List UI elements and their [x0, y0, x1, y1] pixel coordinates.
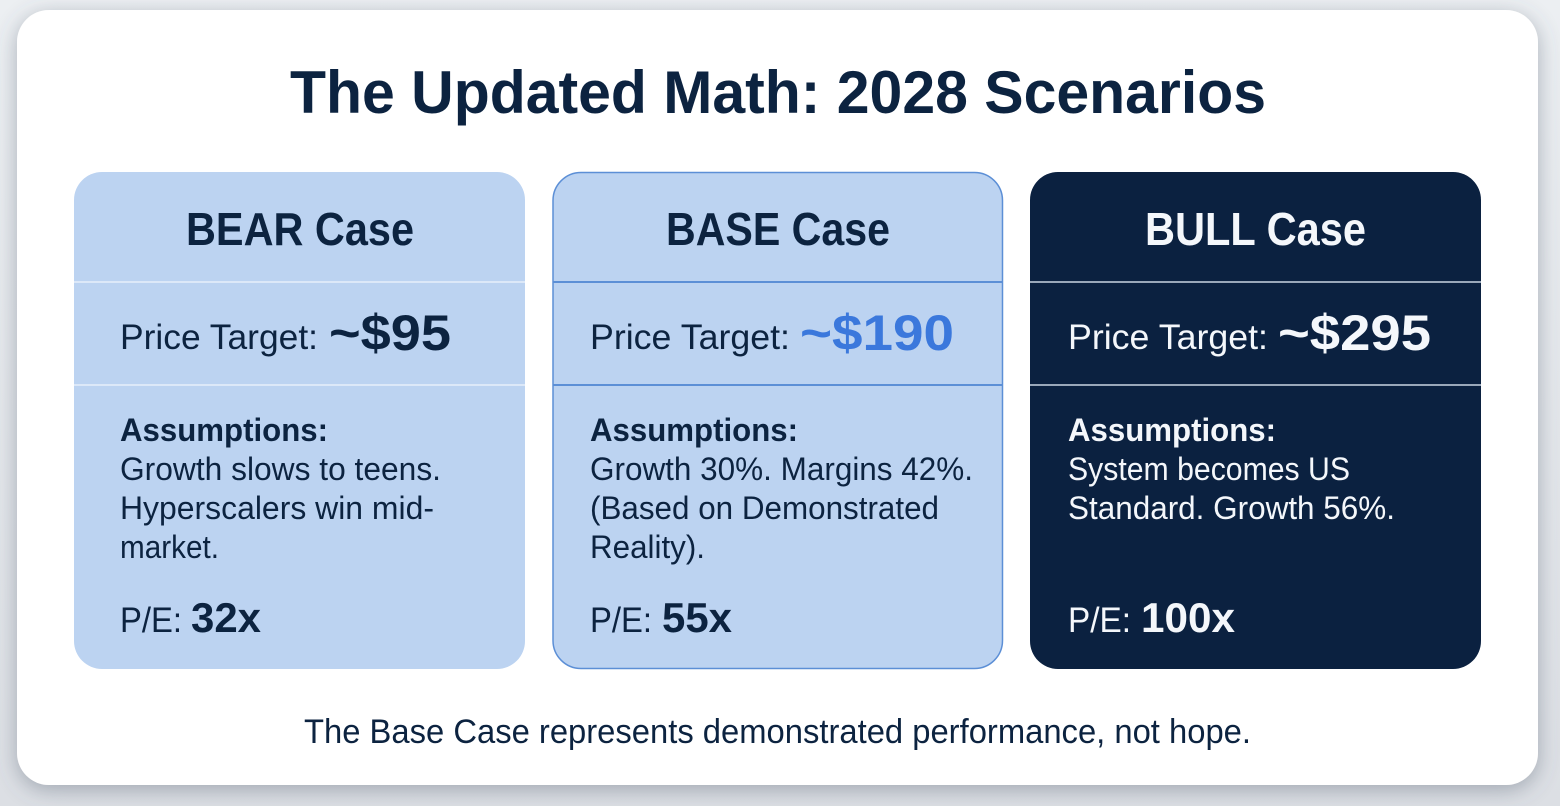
- title: The Updated Math: 2028 Scenarios: [290, 59, 1266, 126]
- bear price target: [120, 305, 451, 361]
- bull heading: BULL Case: [1145, 203, 1366, 255]
- base assumptions: Assumptions:: [590, 412, 798, 448]
- bull assumptions: Standard. Growth 56%.: [1068, 490, 1395, 526]
- panel: bull case: [1030, 172, 1481, 669]
- bull assumptions: System becomes US: [1068, 451, 1350, 487]
- bear assumptions: Growth slows to teens.: [120, 451, 441, 487]
- bull price target: ~$295: [1278, 305, 1431, 361]
- base assumptions: (Based on Demonstrated: [590, 490, 939, 526]
- footer note: The Base Case represents demonstrated performance, not hope.: [304, 713, 1251, 751]
- base assumptions: Reality).: [590, 529, 705, 565]
- bear assumptions: market.: [120, 529, 219, 565]
- base assumptions: Growth 30%. Margins 42%.: [590, 451, 973, 487]
- bull P/E: [1068, 594, 1236, 641]
- base assumptions: [590, 412, 973, 565]
- base price target: ~$190: [800, 305, 954, 361]
- base price target: Price Target:: [590, 318, 790, 357]
- bull assumptions: Assumptions:: [1068, 412, 1276, 448]
- bull P/E: P/E:: [1068, 601, 1131, 640]
- bear assumptions: Assumptions:: [120, 412, 328, 448]
- base P/E: [590, 594, 733, 641]
- bear heading: BEAR Case: [186, 203, 414, 255]
- base price target: [590, 305, 954, 361]
- bull price target: Price Target:: [1068, 318, 1268, 357]
- bear assumptions: [120, 412, 441, 565]
- base P/E: 55x: [662, 594, 733, 641]
- bear P/E: P/E:: [120, 601, 182, 640]
- bull price target: [1068, 305, 1431, 361]
- base heading: BASE Case: [666, 203, 890, 255]
- bear price target: ~$95: [329, 305, 451, 361]
- bull assumptions: [1068, 412, 1395, 526]
- bear price target: Price Target:: [120, 318, 318, 357]
- bull P/E: 100x: [1141, 594, 1236, 641]
- bear P/E: [120, 594, 262, 641]
- base P/E: P/E:: [590, 601, 652, 640]
- bear assumptions: Hyperscalers win mid-: [120, 490, 434, 526]
- bear P/E: 32x: [191, 594, 262, 641]
- panel: bear case: [74, 172, 525, 669]
- panel: base case: [553, 172, 1003, 668]
